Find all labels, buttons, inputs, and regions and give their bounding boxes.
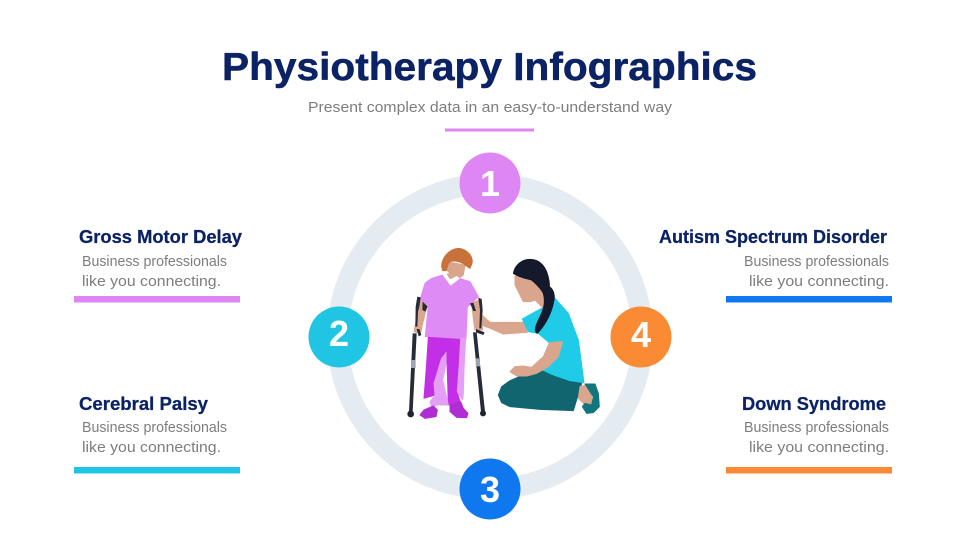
subtitle: Present complex data in an easy-to-understand way bbox=[308, 99, 673, 116]
number badge 4 bbox=[610, 306, 672, 368]
number badge 1 bbox=[460, 152, 520, 214]
panel: Gross Motor Delay: Business professionals bbox=[82, 253, 227, 270]
ring bbox=[338, 184, 642, 489]
title accent line bbox=[445, 128, 534, 132]
number badge 4: 4 bbox=[631, 314, 651, 355]
number badge 3 bbox=[460, 458, 520, 520]
right crutch bbox=[470, 298, 486, 416]
number badge 2 bbox=[308, 306, 370, 368]
panel: Cerebral Palsy: Business professionals bbox=[82, 419, 227, 436]
panel: Gross Motor Delay: like you connecting. bbox=[82, 273, 221, 290]
number badge 2: 2 bbox=[329, 313, 349, 354]
panel: Gross Motor Delay bbox=[74, 227, 242, 302]
number badge 3: 3 bbox=[480, 469, 500, 510]
left crutch bbox=[407, 297, 428, 417]
illustration: therapist helping child on crutches bbox=[407, 248, 599, 418]
panel: Down Syndrome: Down Syndrome bbox=[742, 394, 886, 414]
panel: Cerebral Palsy bbox=[74, 394, 240, 474]
panel: Autism Spectrum Disorder: Autism Spectrum Disorder bbox=[659, 227, 887, 247]
panel: Autism Spectrum Disorder: Business professionals bbox=[744, 253, 889, 270]
panel: Cerebral Palsy: Cerebral Palsy bbox=[79, 394, 208, 414]
panel: Down Syndrome bbox=[726, 394, 892, 474]
panel: Gross Motor Delay: Gross Motor Delay bbox=[79, 227, 242, 247]
child figure bbox=[414, 248, 483, 418]
panel: Autism Spectrum Disorder: like you connecting. bbox=[749, 273, 889, 290]
panel: Cerebral Palsy: like you connecting. bbox=[82, 439, 221, 456]
panel: Down Syndrome: like you connecting. bbox=[749, 439, 889, 456]
therapist figure bbox=[473, 259, 599, 413]
panel: Autism Spectrum Disorder bbox=[659, 227, 892, 302]
title: Physiotherapy Infographics bbox=[222, 46, 757, 89]
number badge 1: 1 bbox=[480, 163, 500, 204]
panel: Down Syndrome: Business professionals bbox=[744, 419, 889, 436]
